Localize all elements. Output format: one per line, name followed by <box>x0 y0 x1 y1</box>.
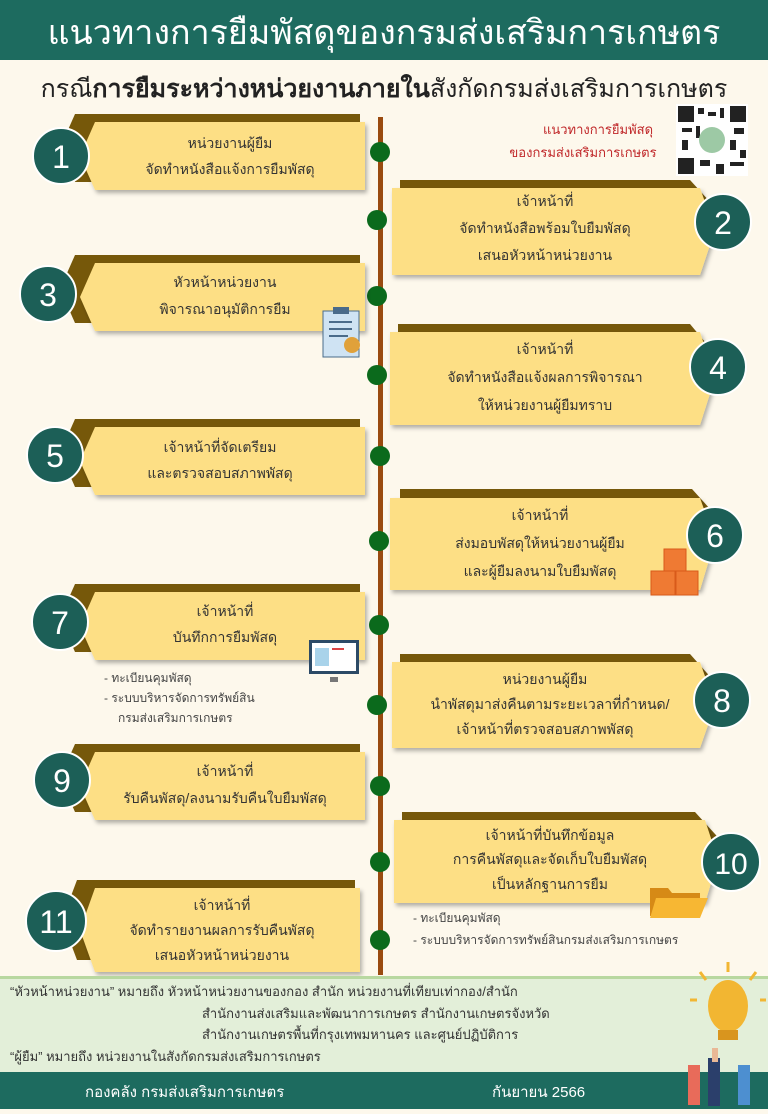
step 8: นำพัสดุมาส่งคืนตามระยะเวลาที่กำหนด/ <box>430 695 670 713</box>
note 7: - ทะเบียนคุมพัสดุ <box>104 671 192 686</box>
step 5: เจ้าหน้าที่จัดเตรียม <box>164 438 276 455</box>
step 1: 1 <box>52 139 70 175</box>
timeline <box>367 117 390 975</box>
note 10 <box>413 911 679 947</box>
step 2: เจ้าหน้าที่ <box>517 192 573 209</box>
step 5: และตรวจสอบสภาพพัสดุ <box>147 465 293 482</box>
title: แนวทางการยืมพัสดุของกรมส่งเสริมการเกษตร <box>48 14 720 53</box>
step 4: จัดทำหนังสือแจ้งผลการพิจารณา <box>447 369 643 385</box>
bottom bar: กองคลัง กรมส่งเสริมการเกษตร <box>85 1084 284 1101</box>
note 7 <box>104 671 255 725</box>
step 9: รับคืนพัสดุ/ลงนามรับคืนใบยืมพัสดุ <box>123 790 327 807</box>
step 3: 3 <box>39 277 57 313</box>
step 2: จัดทำหนังสือพร้อมใบยืมพัสดุ <box>459 220 631 237</box>
step 7: เจ้าหน้าที่ <box>197 602 253 619</box>
step 11: 11 <box>39 904 73 940</box>
step 11: จัดทำรายงานผลการรับคืนพัสดุ <box>129 922 315 939</box>
step 9: เจ้าหน้าที่ <box>197 762 253 779</box>
step 3: พิจารณาอนุมัติการยืม <box>159 301 291 318</box>
footer notes panel: สำนักงานส่งเสริมและพัฒนาการเกษตร สำนักงานเกษตรจังหวัด <box>202 1006 550 1021</box>
icon: folder <box>650 888 708 918</box>
step 9: 9 <box>53 763 71 799</box>
step 10: การคืนพัสดุและจัดเก็บใบยืมพัสดุ <box>453 850 647 868</box>
icon: clipboard <box>323 307 360 357</box>
subtitle: กรณีการยืมระหว่างหน่วยงานภายในสังกัดกรมส่งเสริมการเกษตร <box>41 73 727 103</box>
step 2: 2 <box>714 205 732 241</box>
step 2: เสนอหัวหน้าหน่วยงาน <box>478 247 613 263</box>
step 9 <box>34 744 365 820</box>
QR callout <box>509 104 748 176</box>
step 11: เจ้าหน้าที่ <box>194 896 250 913</box>
step 8 <box>392 654 750 748</box>
QR callout: แนวทางการยืมพัสดุ <box>543 122 653 138</box>
note 10: - ระบบบริหารจัดการทรัพย์สินกรมส่งเสริมการเกษตร <box>413 933 679 947</box>
step 1: จัดทำหนังสือแจ้งการยืมพัสดุ <box>145 161 315 178</box>
header bar <box>0 0 768 60</box>
step 11: เสนอหัวหน้าหน่วยงาน <box>155 947 290 963</box>
QR callout: ของกรมส่งเสริมการเกษตร <box>509 145 657 160</box>
footer notes panel <box>0 976 768 1072</box>
step 10: 10 <box>714 848 748 881</box>
step 8: เจ้าหน้าที่ตรวจสอบสภาพพัสดุ <box>457 720 633 738</box>
step 2 <box>392 180 751 275</box>
footer notes panel: สำนักงานเกษตรพื้นที่กรุงเทพมหานคร และศูนย์ปฏิบัติการ <box>202 1025 518 1043</box>
step 8: หน่วยงานผู้ยืม <box>503 671 587 688</box>
step 6: ส่งมอบพัสดุให้หน่วยงานผู้ยืม <box>455 535 625 552</box>
icon: boxes <box>651 549 698 595</box>
step 10: เจ้าหน้าที่บันทึกข้อมูล <box>486 826 614 844</box>
step 4 <box>390 324 746 425</box>
step 4: เจ้าหน้าที่ <box>517 340 573 357</box>
footer notes panel: “ผู้ยืม” หมายถึง หน่วยงานในสังกัดกรมส่งเสริมการเกษตร <box>10 1049 321 1065</box>
step 6: และผู้ยืมลงนามใบยืมพัสดุ <box>464 563 616 580</box>
bottom bar <box>0 1072 768 1109</box>
step 5: 5 <box>46 438 64 474</box>
step 1: หน่วยงานผู้ยืม <box>188 135 272 152</box>
step 8: 8 <box>713 683 731 719</box>
step 6 <box>390 489 743 595</box>
step 7: 7 <box>51 605 69 641</box>
step 3: หัวหน้าหน่วยงาน <box>174 274 277 290</box>
step 7: บันทึกการยืมพัสดุ <box>173 629 277 646</box>
step 10 <box>394 812 760 918</box>
step 4: 4 <box>709 350 727 386</box>
note 10: - ทะเบียนคุมพัสดุ <box>413 911 501 926</box>
step 7 <box>32 584 365 682</box>
step 3 <box>20 255 365 357</box>
icon: monitor <box>309 640 359 682</box>
step 5 <box>27 419 365 495</box>
footer notes panel: “หัวหน้าหน่วยงาน” หมายถึง หัวหน้าหน่วยงานของกอง สำนัก หน่วยงานที่เทียบเท่ากอง/สำนัก <box>10 983 518 999</box>
step 6: เจ้าหน้าที่ <box>512 506 568 523</box>
step 6: 6 <box>706 518 724 554</box>
step 4: ให้หน่วยงานผู้ยืมทราบ <box>478 397 612 414</box>
note 7: กรมส่งเสริมการเกษตร <box>118 711 233 725</box>
step 1 <box>33 114 365 190</box>
note 7: - ระบบบริหารจัดการทรัพย์สิน <box>104 691 255 705</box>
bottom bar: กันยายน 2566 <box>492 1084 585 1101</box>
step 11 <box>26 880 360 972</box>
step 10: เป็นหลักฐานการยืม <box>492 875 608 893</box>
icon: lightbulb with people <box>688 962 766 1106</box>
